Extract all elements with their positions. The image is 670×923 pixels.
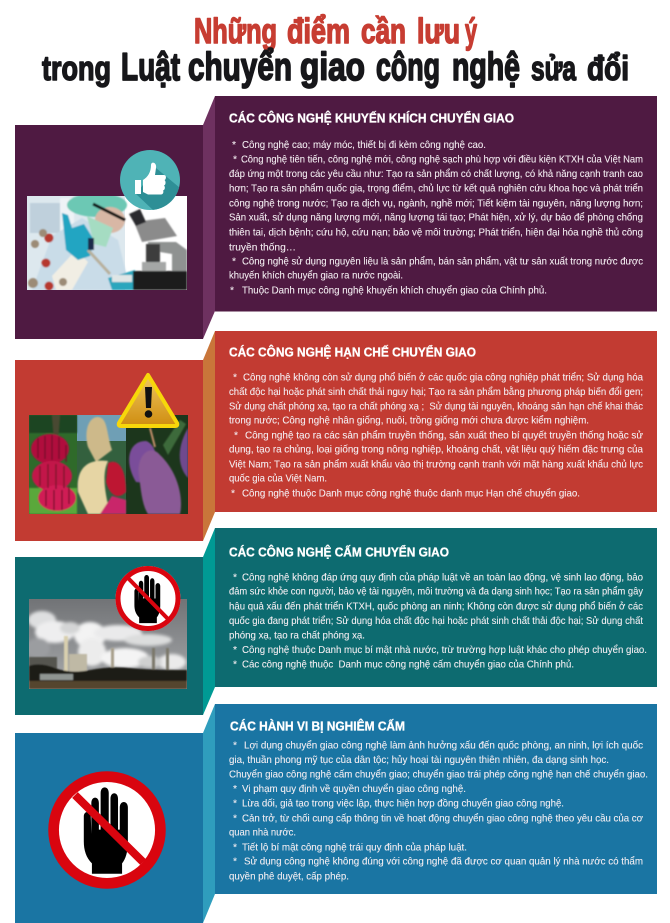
title: giao [300,46,365,89]
body text: Vi phạm quy định về quyền chuyển giao công nghệ. [242,783,466,795]
photo: factory smoke stacks [26,599,187,689]
title: Những [194,12,277,51]
body text: Công nghệ không đáp ứng quy định của pháp luật về an toàn lao động, vệ sinh lao động, bảo [242,572,643,584]
body text: Lừa dối, giả tạo trong việc lập, thực hiện hợp đồng chuyển giao công nghệ. [242,798,564,810]
body text: * [233,572,237,584]
body text: quốc gia của Việt Nam. [229,472,327,484]
panel shape: red folded card [15,331,657,541]
title [42,12,629,89]
body text: truyền thống… [229,242,296,254]
body text: * [230,286,234,296]
body text: Chuyển giao công nghệ cấm chuyển giao; chuyển giao trái phép công nghệ hạn chế chuyển giao. [229,768,648,780]
heading: CÁC CÔNG NGHỆ CẤM CHUYỂN GIAO [229,544,449,560]
body text [229,740,648,882]
body text [229,572,647,670]
heading: CÁC HÀNH VI BỊ NGHIÊM CẤM [230,718,405,734]
body text: Công nghệ không còn sử dụng phổ biến ở các quốc gia công nghiệp phát triển; Sử dụng hóa [243,372,643,384]
icon: warning triangle [119,375,177,426]
body text [229,372,643,500]
body text: Tiết lộ bí mật công nghệ trái quy định của pháp luật. [242,842,467,854]
title: điểm [287,12,350,51]
title: đổi [587,50,629,88]
title: lưu [417,12,460,51]
title: chuyển [188,46,292,89]
body text: Việt Nam; Tạo ra sản phẩm xuất khẩu vào thị trường cạnh tranh với mặt hàng xuất khẩu chủ lực [229,458,643,470]
body text: quyền phê duyệt, cấp phép. [229,870,349,882]
body text: Lợi dụng chuyển giao công nghệ làm ảnh hưởng xấu đến quốc phòng, an ninh, lợi ích quốc [244,740,643,752]
body text: quốc gia đang phát triển; Sử dụng hóa chất độc hại hoặc phát sinh chất thải độc hại; Sử dụng chất [229,615,643,627]
body text: Thuộc Danh mục công nghệ khuyến khích chuyển giao của Chính phủ. [242,284,547,296]
body text: * [232,256,236,268]
body text: Công nghệ thuộc Danh mục bí mật nhà nước, trừ trường hợp luật khác cho phép chuyển giao. [242,644,647,656]
icon: large stop hand sign [49,772,165,888]
panel: encouraged technologies [15,96,657,339]
body text: khuyến khích chuyển giao ra nước ngoài. [229,270,403,282]
body text: Công nghệ sử dụng nguyên liệu là sản phẩm, bán sản phẩm, vật tư sản xuất trong nước được [242,256,643,268]
body text: * [233,372,237,384]
panel shape: purple folded card [15,96,657,339]
title: ý [465,12,477,51]
body text: * [233,842,237,854]
body text: gia, thuần phong mỹ tục của dân tộc; hủy hoại tài nguyên thiên nhiên, đa dạng sinh học. [229,754,609,766]
panel: prohibited technologies [15,528,657,715]
title: nghệ [452,46,520,89]
body text: hậu quả xấu đến phát triển KTXH, quốc phòng an ninh; Không còn được sử dụng phổ biến ở các [229,600,643,612]
panel: restricted technologies [15,331,657,541]
photo: scientist at microscope [27,193,187,290]
body text: đáp ứng một trong các yêu cầu như: Tạo ra sản phẩm có chất lượng, có khả năng cạnh tranh cao [229,168,643,180]
body text: * [233,660,237,670]
body text: dụng, tạo ra chủng, loại giống trong nông nghiệp, khoáng chất, vật liệu quý hiếm đặc trưng của [229,444,643,456]
body text: * [233,814,237,824]
panel shape: blue folded card [15,704,657,923]
body text: * [233,856,237,868]
title: Luật [121,46,180,89]
body text [229,139,643,296]
body text: * [233,784,237,795]
panel: prohibited acts [15,704,657,923]
body text: * [233,154,237,166]
body text: * [234,430,238,442]
title: cần [361,12,406,51]
icon: thumbs up badge [120,150,180,210]
body text: Sản xuất, sử dụng năng lượng mới, năng lượng tái tạo; Phát hiện, xử lý, dự báo để phòng chống [229,212,643,224]
body text: Các công nghệ thuộc Danh mục công nghệ cấm chuyển giao của Chính phủ. [242,658,574,670]
body text: * [233,740,237,752]
title: trong [42,50,111,88]
body text: * [233,798,237,810]
body text: thiên tai, dịch bệnh; cứu hộ, cứu nạn; bảo vệ môi trường; Phát triển, hiện đại hóa nghề thủ công [229,226,643,238]
panel shape: teal folded card [15,528,657,715]
body text: * [231,488,235,500]
body text: Cản trở, từ chối cung cấp thông tin về hoạt động chuyển giao công nghệ theo yêu cầu của cơ [242,812,643,824]
body text: quan nhà nước. [229,828,296,838]
body text: trong nước; Công nghệ nhân giống, nuôi, trồng giống mới chưa được kiểm nghiệm. [229,414,589,426]
body text: * [232,140,236,151]
body text: hơn; Tạo ra sản phẩm quốc gia, trọng điểm, chủ lực từ kết quả nghiên cứu khoa học và phát triển [229,182,643,194]
body text: Công nghệ tạo ra các sản phẩm truyền thống, sản xuất theo bí quyết truyền thống hoặc sử [245,430,643,442]
photo: red bananas and purple mangoes [29,415,188,514]
body text: Công nghệ thuộc Danh mục công nghệ thuộc danh mục Hạn chế chuyển giao. [242,488,580,500]
title: công [376,46,440,89]
body text: công nghệ trong nước; Tạo ra dịch vụ, ngành, nghề mới; Tiết kiệm tài nguyên, năng lượng hơn; [229,198,643,210]
heading: CÁC CÔNG NGHỆ KHUYẾN KHÍCH CHUYỂN GIAO [229,110,514,126]
body text: Sử dụng công nghệ không đúng với công nghệ đã được cơ quan quản lý nhà nước có thẩm [244,856,643,868]
heading: CÁC CÔNG NGHỆ HẠN CHẾ CHUYỂN GIAO [229,344,476,360]
icon: stop hand sign [116,566,180,631]
body text: phóng xạ, tạo ra chất phóng xạ. [229,630,365,642]
title: sửa [531,50,577,88]
body text: * [233,645,237,656]
body text: Công nghệ cao; máy móc, thiết bị đi kèm công nghệ cao. [242,139,486,151]
body text: chất độc hại hoặc phát sinh chất thải nguy hại; Tạo ra sản phẩm bằng phương pháp biến đổi gen; [229,385,643,398]
